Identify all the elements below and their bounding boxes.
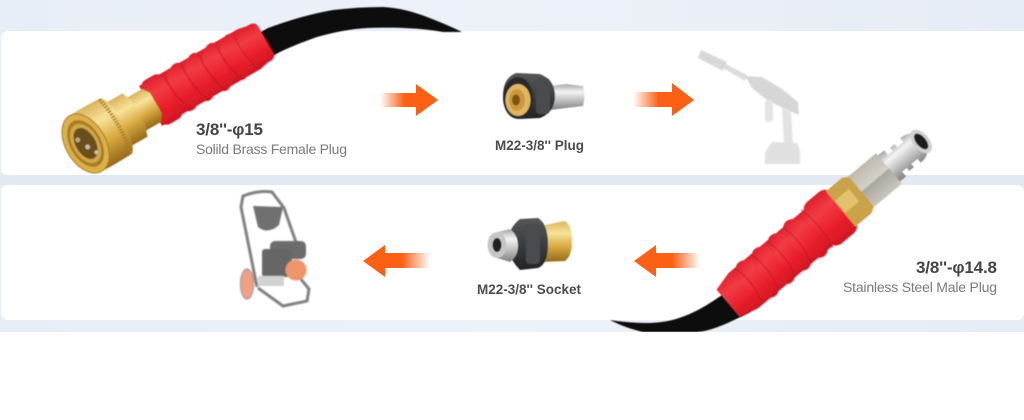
brass inner ring [509,89,525,111]
brass main hex [100,91,151,150]
handle [782,108,793,145]
label: M22 plug: M22-3/8'' Plug [495,138,584,153]
red sleeve [710,185,862,325]
hose: bottom section [610,292,750,332]
hose: top section [250,7,462,62]
infographic canvas [0,0,1024,332]
frame handle and rail [241,192,309,306]
icon: faded gas pressure washer [240,192,309,306]
female brass plug with red sleeve [52,11,282,182]
female plug size: 3/8''-φ15 [196,120,263,139]
nozzle under body [765,100,773,122]
female plug material: Solild Brass Female Plug [196,141,347,157]
plug opening [906,126,936,157]
male plug size: 3/8''-φ14.8 [916,258,997,277]
label: female plug [196,120,347,157]
nut facet [536,78,550,114]
arrow: to M22 socket [634,245,700,277]
icon: M22 plug adapter [503,73,584,119]
steel stem [550,84,584,110]
pump [258,276,284,286]
panel: bottom row [1,185,1024,320]
black rubber nut [503,73,555,119]
brass small hex nut [124,87,165,132]
barrel [723,64,747,81]
steel collar [497,229,518,262]
nut facet [526,224,540,264]
plug bore [911,131,931,152]
icon: M22 socket adapter [488,218,572,270]
battery [765,142,800,164]
orange engine cover [286,260,306,280]
steel tip bore [492,238,502,252]
arrow: to pressure washer [363,245,430,277]
gun body [745,76,799,115]
arrow: to spray gun [633,83,694,116]
divider band [0,175,1024,185]
barrel grip [698,50,727,71]
label: male plug [843,258,997,295]
page background band [0,0,1024,332]
male stainless plug with red sleeve [710,115,945,325]
stainless plug body [878,127,934,181]
brass nut [826,173,878,227]
nut face [503,77,533,119]
arrow: to M22 plug [380,84,438,116]
control panel [253,206,283,231]
engine block [262,249,292,277]
stainless hex [849,153,902,207]
socket face [52,106,119,181]
brass ring [506,84,530,116]
black rubber nut [508,218,548,270]
icon: faded cordless spray gun [698,50,800,164]
fuel tank [270,241,306,259]
steel tip [488,232,506,258]
red sleeve [137,16,279,130]
label: M22 socket: M22-3/8'' Socket [477,282,582,297]
brass coupler [540,221,572,262]
knurl ring [100,98,134,153]
brass bore [512,94,520,106]
panel: top row [1,31,1024,175]
male plug material: Stainless Steel Male Plug [843,279,997,295]
brass nut highlight [835,189,859,213]
orange wheel [240,269,254,299]
brass knurled collar [70,94,139,171]
